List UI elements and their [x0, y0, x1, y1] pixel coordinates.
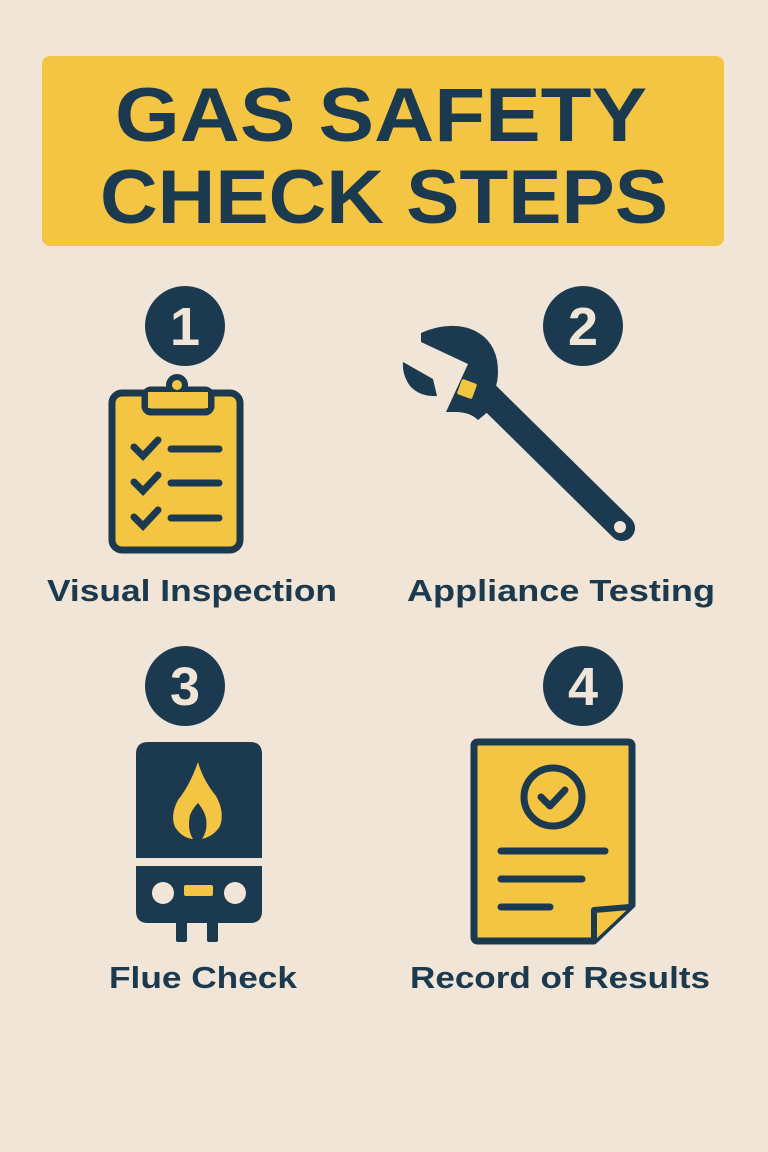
- icon: wrench: [403, 326, 626, 533]
- label: Appliance Testing: Appliance Testing: [407, 573, 715, 608]
- step 3 badge: [145, 646, 225, 726]
- label: Record of Results: Record of Results: [410, 960, 710, 995]
- title banner: [42, 56, 724, 246]
- step 1 badge: 1: [170, 297, 200, 357]
- step 2 badge: [543, 286, 623, 366]
- step 3 badge: 3: [170, 657, 200, 717]
- step 2 badge: 2: [568, 297, 598, 357]
- step 4 badge: [543, 646, 623, 726]
- title banner: GAS SAFETY: [115, 73, 647, 158]
- title banner: CHECK STEPS: [100, 155, 668, 240]
- icon: clipboard: [112, 377, 240, 550]
- label: Flue Check: Flue Check: [109, 960, 298, 995]
- step 4 badge: 4: [568, 657, 598, 717]
- label: Visual Inspection: Visual Inspection: [47, 573, 337, 608]
- step 1 badge: [145, 286, 225, 366]
- icon: record document: [474, 742, 632, 941]
- icon: boiler with flame: [136, 742, 262, 942]
